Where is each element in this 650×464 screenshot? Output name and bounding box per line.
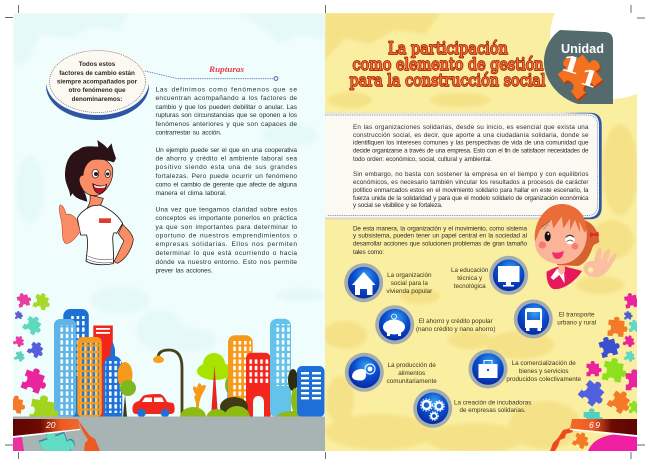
panel: intro text box: En las organizaciones solidarias, desde su inicio, es esencial que exista una: [353, 124, 589, 131]
building: light blue: [54, 319, 76, 417]
text block: Rupturas body: dónde va nuestro entorno. Esto nos permite: [156, 259, 297, 266]
list item: vivienda popular: La organización: [387, 272, 432, 279]
text block: Rupturas body: rupturas son circunstancias que se oponen a los: [156, 112, 298, 119]
list item: comercialización: La comercialización de: [512, 360, 576, 367]
panel: intro text box: político enmarcados estos en el movimiento solidario para hallar en este escenario, la: [353, 187, 589, 194]
heading: Rupturas: Rupturas: [208, 64, 245, 74]
street lamp: [153, 350, 182, 417]
list item: comercialización: bienes y servicios: [519, 368, 569, 375]
building: orange right: [228, 335, 253, 417]
icon: food: [352, 364, 375, 381]
list item: producción de alimentos: [345, 353, 437, 392]
text block: Rupturas body: Una vez que tengamos claridad sobre estos: [156, 206, 298, 214]
callout: speech oval: Todos estos: [79, 61, 116, 68]
callout: speech oval: siempre acompañados por: [57, 78, 138, 86]
road: [13, 416, 325, 451]
list item: vivienda popular: [344, 263, 432, 302]
icon: orange puzzle piece: 1: [557, 50, 585, 81]
text block: Rupturas body: contrarrestar su acción.: [156, 130, 222, 136]
list item: incubadoras: de empresas solidarias.: [459, 407, 526, 414]
list item: educación técnica: [451, 256, 528, 295]
list item: transporte: El transporte: [559, 312, 595, 318]
title: La participación: [388, 39, 508, 59]
icon: house: [352, 272, 376, 295]
text block: Rupturas body: de ahorro y crédito el ambiente laboral sea: [156, 156, 297, 162]
icon: piggy bank: [383, 314, 405, 336]
page number ribbon left: [13, 419, 100, 451]
panel: intro text box: construcción social, es decir, que aporte a una ciudadanía solidaria, donde se: [353, 132, 589, 139]
page number ribbon right: 69: [589, 420, 601, 430]
panel: intro text box: decide organizarse a través de una empresa. Esto con el fin de satisfacer necesidades de: [353, 148, 589, 154]
building: blue tower: [103, 342, 122, 417]
title: para la construcción social: [350, 71, 546, 91]
panel: intro text box: y social se visibilice y se fortaleza.: [353, 202, 443, 209]
page number ribbon left: 20: [45, 420, 56, 430]
text block: Rupturas body: positivo siendo esta una de sus grandes: [156, 164, 298, 171]
tree: orange and green: [118, 362, 136, 417]
connector line with end dot: [145, 71, 278, 80]
panel: right page background: [323, 13, 638, 453]
panel: unit badge: [544, 13, 637, 104]
list item: educación técnica: técnica y: [457, 275, 483, 282]
list item: comercialización: [468, 350, 581, 388]
icon: monitor: [498, 266, 520, 286]
text block: Rupturas body: fortalezas. Pero puede ocurrir un fenómeno: [156, 173, 297, 180]
building: light blue right: [270, 319, 298, 418]
text block: Rupturas body: Un ejemplo puede ser el que en una cooperativa: [156, 147, 297, 154]
text block: lead-in to list: tales como:: [353, 249, 384, 256]
text block: Rupturas body: Las definimos como fenómenos que se: [156, 87, 297, 94]
illustration: city skyline left: [54, 309, 324, 430]
list item: vivienda popular: social para la: [391, 280, 428, 287]
icon: red car: [132, 394, 175, 417]
title: [350, 39, 546, 91]
icon: orange puzzle piece: 1: [576, 63, 602, 94]
text block: Rupturas body: [156, 87, 298, 274]
icon: gears: [420, 399, 444, 420]
title: como elemento de gestión: [352, 55, 544, 75]
callout: speech oval: factores de cambio están: [59, 70, 135, 77]
callout: speech oval: denominaremos:: [72, 96, 122, 103]
trees: green cluster: [193, 353, 245, 417]
text block: Rupturas body: prever las acciones.: [156, 268, 213, 274]
list item: ahorro y crédito: El ahorro y crédito popular: [419, 318, 493, 325]
text block: Rupturas body: encuentran acompañando a los factores de: [156, 95, 297, 102]
icon: briefcase: [478, 360, 498, 378]
text block: Rupturas body: cambio y que los pueden debilitar o anular. Las: [156, 104, 298, 111]
text block: lead-in to list: [353, 226, 527, 256]
text block: lead-in to list: desarrollar acciones que solucionen problemas de gran tamaño: [353, 240, 527, 248]
list item: incubadoras: [413, 389, 531, 428]
text block: Rupturas body: ya que son importantes para determinar lo: [156, 224, 297, 231]
list item: ahorro y crédito: (nano crédito y nano ahorro): [416, 326, 495, 333]
list item: producción de alimentos: comunitariamente: [387, 378, 437, 385]
text block: Rupturas body: determinar lo que está ocurriendo o hacia: [156, 250, 297, 257]
list item: incubadoras: La creación de incubadoras: [454, 400, 531, 406]
list item: transporte: [514, 300, 596, 338]
building: red with arch: [246, 353, 271, 417]
building: orange: [77, 337, 102, 417]
panel: intro text box: fuerza unida de la solidaridad y para que el modelo solidario de organización económica: [353, 195, 589, 202]
list item: educación técnica: La educación: [451, 267, 489, 274]
puzzle pieces left: [13, 293, 58, 416]
text block: lead-in to list: De esta manera, la organización y el movimiento, como sistema: [353, 226, 527, 232]
building: red back: [93, 326, 113, 418]
list item: comercialización: producidos colectivamente: [506, 376, 581, 383]
panel: intro text box: [325, 113, 602, 219]
panel: intro text box: identifiquen los intereses comunes y las perspectivas de vida de una comunidad que: [353, 140, 589, 146]
panel: intro text box: Sin embargo, no basta con sostener la empresa en el tiempo y con equilibrios: [353, 171, 588, 178]
list item: transporte: urbano y rural: [557, 320, 596, 326]
page number ribbon right: [550, 419, 637, 451]
illustration: girl with OK hand: [535, 204, 617, 289]
text block: Rupturas body: manera el clima laboral.: [156, 190, 227, 197]
panel: intro text box: económicos, es necesario también vincular los resultados a procesos de carácter: [353, 179, 588, 186]
hedge: [180, 397, 250, 430]
list item: ahorro y crédito: [375, 305, 495, 344]
panel: left page background: [13, 13, 325, 451]
callout: speech oval: otro fenómeno que: [68, 87, 126, 94]
callout: speech oval: [46, 48, 149, 120]
building: blue right: [277, 366, 324, 423]
illustration: boy with thumb up: [59, 140, 133, 265]
building: blue back: [63, 309, 89, 417]
list item: producción de alimentos: La producción de: [388, 362, 436, 369]
list item: producción de alimentos: alimentos: [398, 370, 425, 377]
list item: educación técnica: tecnológica: [454, 283, 486, 290]
icon: orange puzzle piece: [558, 54, 604, 102]
text block: Rupturas body: como el cambio de gerente que afecte de alguna: [156, 182, 297, 188]
puzzle pieces right: [578, 293, 637, 419]
text block: Rupturas body: empresas solidarias. Ellos nos permiten: [156, 241, 297, 248]
text block: Rupturas body: oportuno de nuestros emprendimientos o: [156, 232, 297, 240]
heading: Unidad: Unidad: [561, 41, 604, 56]
text block: Rupturas body: conceptos es importante ponerlos en práctica: [156, 215, 297, 222]
panel: intro text box: todo orden: económico, social, cultural y ambiental.: [353, 156, 492, 163]
icon: bus: [525, 308, 542, 331]
text block: Rupturas body: fenómenos anteriores y que son capaces de: [156, 121, 297, 128]
list item: vivienda popular: vivienda popular: [386, 288, 432, 295]
text block: lead-in to list: y subsistema, pueden tener un papel central en la sociedad al: [353, 232, 527, 240]
